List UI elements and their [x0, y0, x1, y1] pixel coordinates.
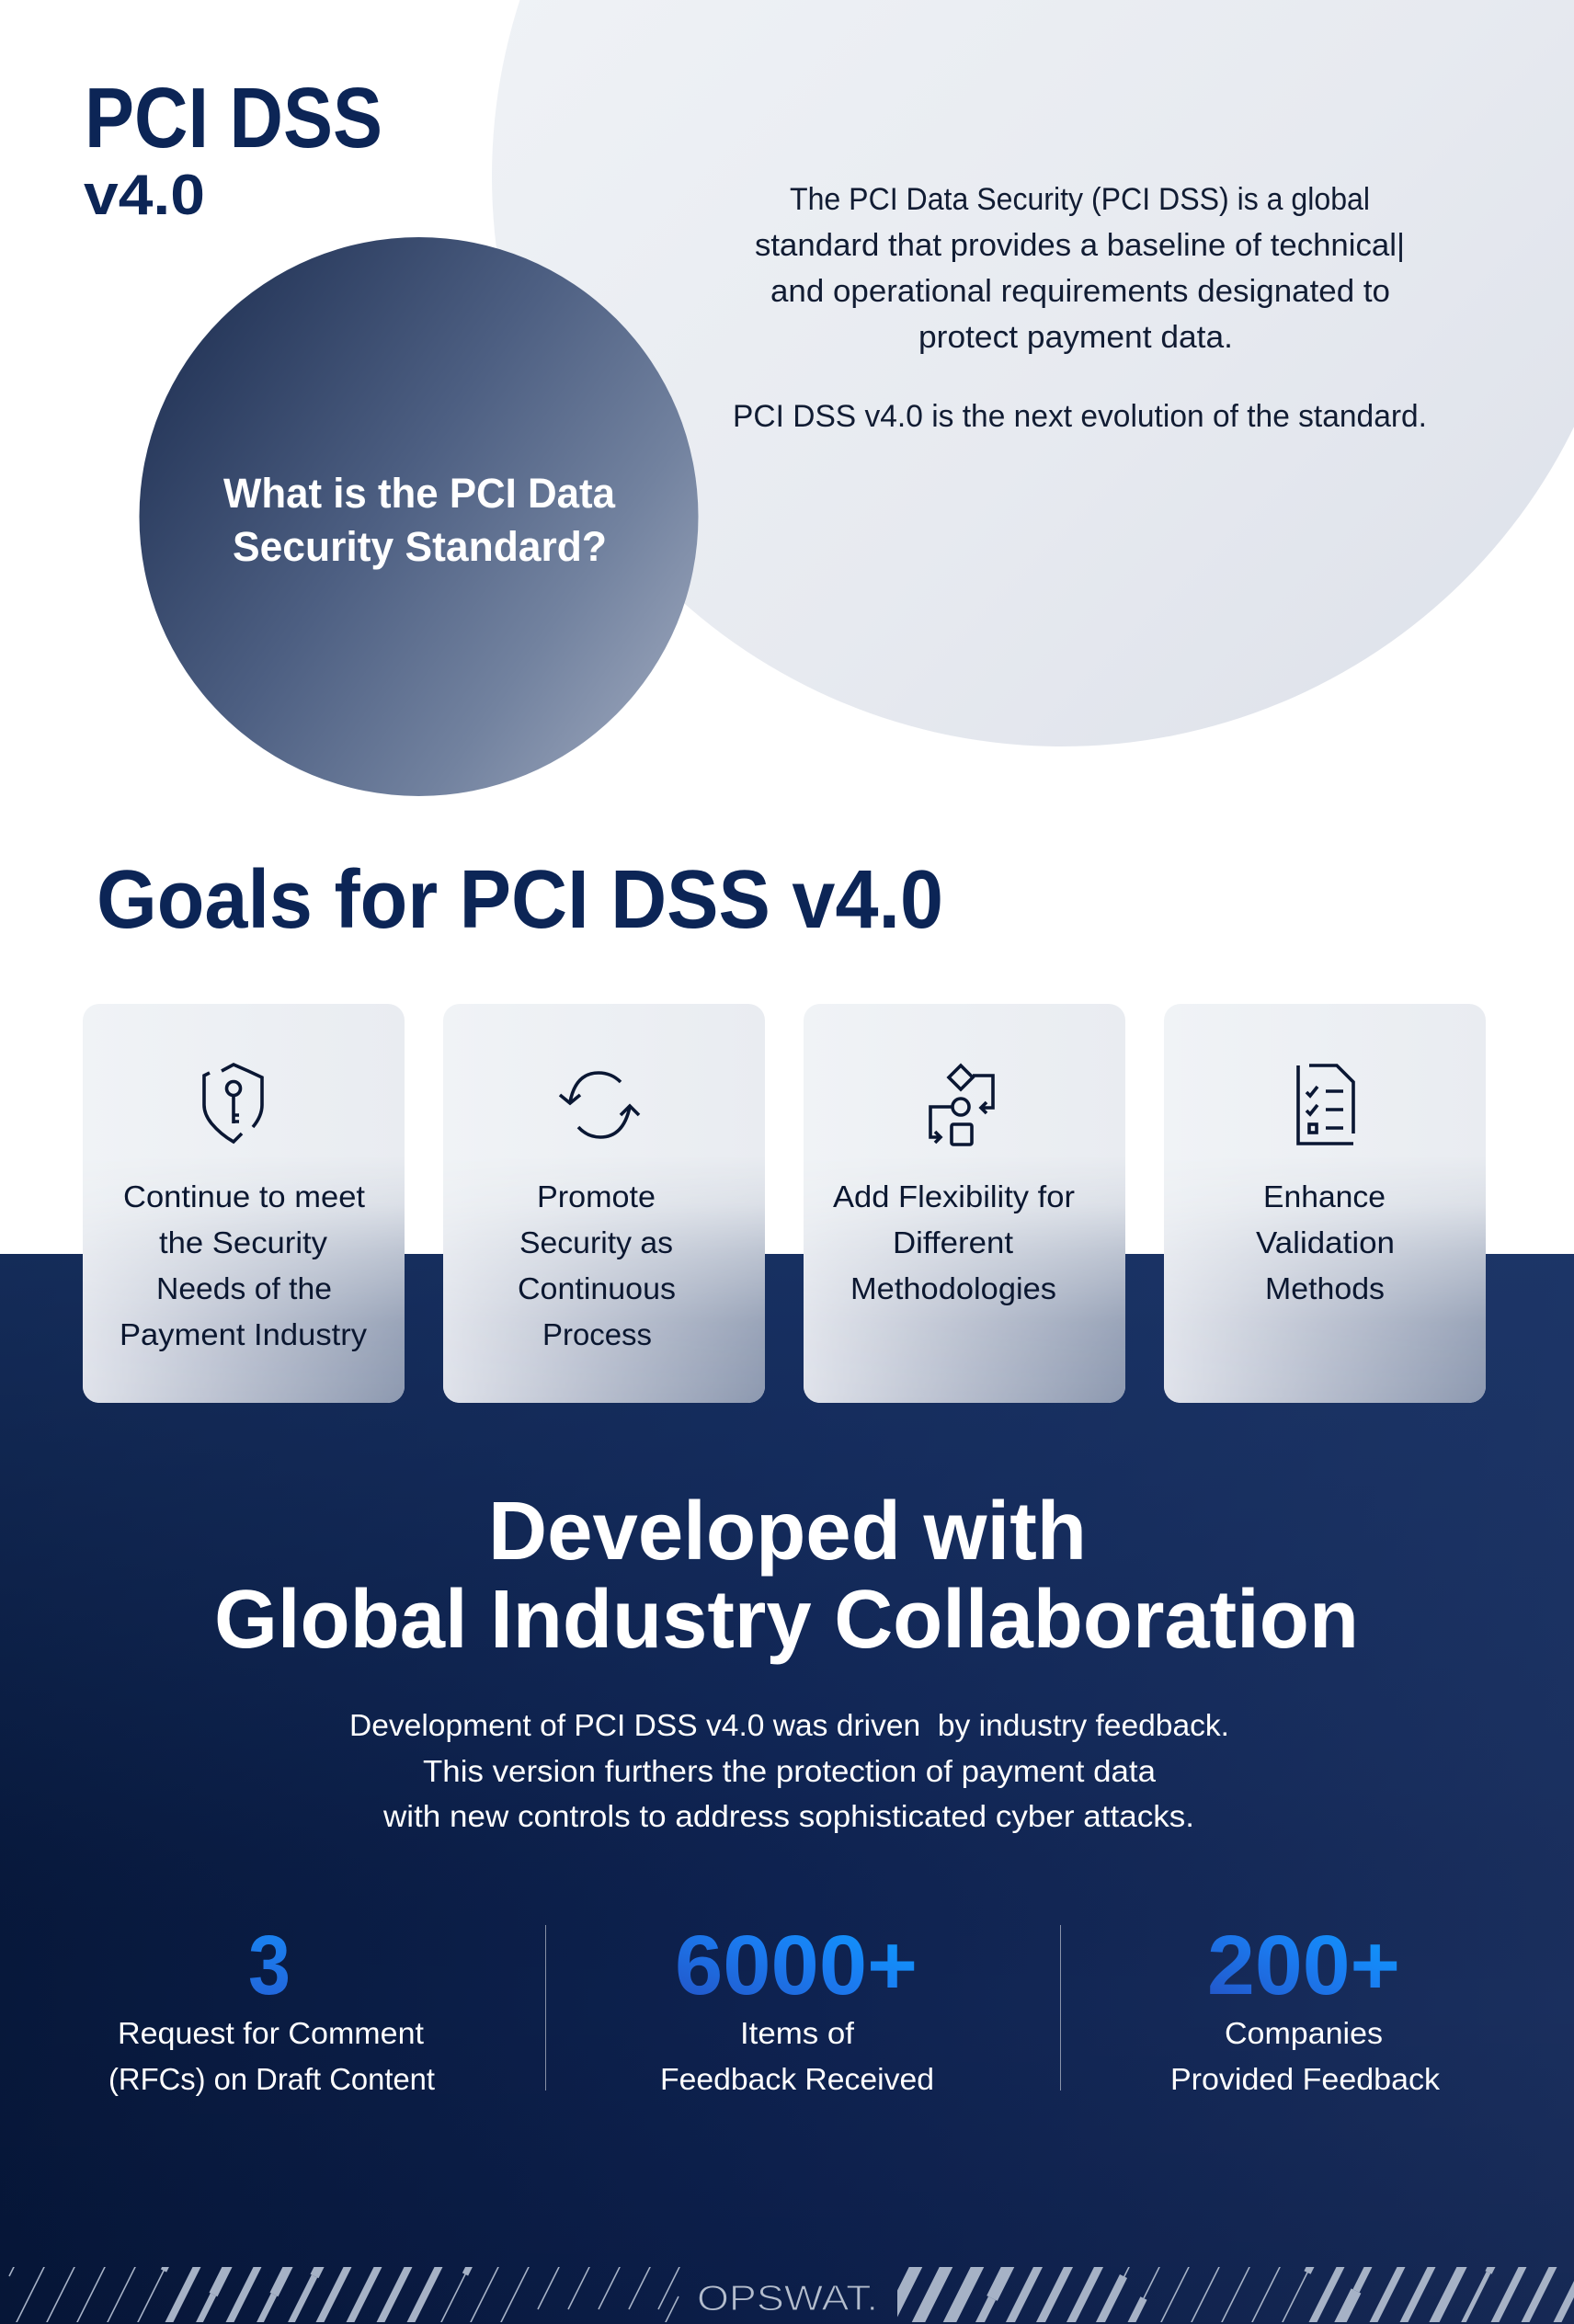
- stat: companies: Companies: [1225, 2016, 1383, 2050]
- icon: checklist document: [1298, 1065, 1353, 1144]
- stat: companies: 200+: [1207, 1919, 1400, 2012]
- title: PCI DSS: [85, 70, 382, 165]
- icon: shield with key: [204, 1065, 262, 1142]
- card text: [1256, 1179, 1395, 1305]
- footer stripes left: [8, 2267, 680, 2322]
- stat: companies: [1170, 1919, 1441, 2096]
- card text: Continuous: [518, 1271, 676, 1305]
- collaboration description: This version furthers the protection of payment data: [423, 1754, 1157, 1788]
- card: security needs: [83, 1004, 405, 1403]
- card text: Process: [542, 1317, 652, 1351]
- card text: [518, 1179, 676, 1351]
- card text: Continue to meet: [123, 1179, 365, 1213]
- divider: [1060, 1925, 1061, 2090]
- stat: feedback items: 6000+: [675, 1919, 918, 2012]
- intro text block: [733, 182, 1427, 434]
- card: continuous process: [443, 1004, 765, 1403]
- icon: cycle arrows: [560, 1073, 639, 1137]
- title: v4.0: [84, 164, 205, 227]
- card text: Methods: [1265, 1271, 1385, 1305]
- title: [84, 70, 382, 227]
- card text: Methodologies: [850, 1271, 1056, 1305]
- stat: feedback items: [660, 1919, 934, 2096]
- intro text block: and operational requirements designated to: [770, 274, 1390, 309]
- intro text block: PCI DSS v4.0 is the next evolution of the standard.: [733, 399, 1427, 434]
- stat: companies: Provided Feedback: [1170, 2062, 1441, 2096]
- intro text block: protect payment data.: [918, 320, 1233, 355]
- dark circle with question: [140, 237, 699, 796]
- card background: [804, 1004, 1125, 1403]
- card: validation: [1164, 1004, 1486, 1403]
- collaboration description: Development of PCI DSS v4.0 was driven by industry feedback.: [349, 1708, 1229, 1742]
- intro text block: The PCI Data Security (PCI DSS) is a global: [790, 182, 1370, 217]
- stat: feedback items: Items of: [740, 2016, 855, 2050]
- heading: global collaboration: Developed with: [488, 1486, 1087, 1578]
- card text: [833, 1179, 1075, 1305]
- stat: request for comment: [108, 1919, 435, 2096]
- footer stripes right: [897, 2267, 1574, 2322]
- collaboration description: [349, 1708, 1229, 1833]
- card text: Enhance: [1263, 1179, 1386, 1213]
- dark circle with question: Security Standard?: [233, 523, 607, 570]
- card text: Different: [893, 1225, 1013, 1259]
- intro text block: standard that provides a baseline of technical|: [755, 228, 1405, 263]
- collaboration description: with new controls to address sophisticated cyber attacks.: [382, 1799, 1194, 1833]
- heading: goals: Goals for PCI DSS v4.0: [97, 854, 943, 946]
- stat: request for comment: (RFCs) on Draft Content: [108, 2062, 435, 2096]
- card text: Payment Industry: [120, 1317, 368, 1351]
- card: flexibility: [804, 1004, 1125, 1403]
- card text: Add Flexibility for: [833, 1179, 1075, 1213]
- card text: [120, 1179, 368, 1351]
- card background: [443, 1004, 765, 1403]
- stat: feedback items: Feedback Received: [660, 2062, 934, 2096]
- stat: request for comment: Request for Comment: [118, 2016, 424, 2050]
- heading: global collaboration: [214, 1486, 1359, 1666]
- footer logo: OPSWAT.: [697, 2279, 878, 2318]
- icon: flow diagram: [930, 1065, 993, 1145]
- dark circle with question: What is the PCI Data: [223, 470, 616, 517]
- card text: Security as: [519, 1225, 673, 1259]
- navy lower background: [0, 1254, 1574, 2324]
- large pale circle: [492, 0, 1574, 746]
- card text: Promote: [537, 1179, 656, 1213]
- card text: the Security: [159, 1225, 328, 1259]
- card background: [83, 1004, 405, 1403]
- card text: Validation: [1256, 1225, 1395, 1259]
- card text: Needs of the: [156, 1271, 332, 1305]
- stat: request for comment: 3: [248, 1919, 291, 2012]
- card background: [1164, 1004, 1486, 1403]
- divider: [545, 1925, 546, 2090]
- heading: global collaboration: Global Industry Collaboration: [214, 1574, 1359, 1666]
